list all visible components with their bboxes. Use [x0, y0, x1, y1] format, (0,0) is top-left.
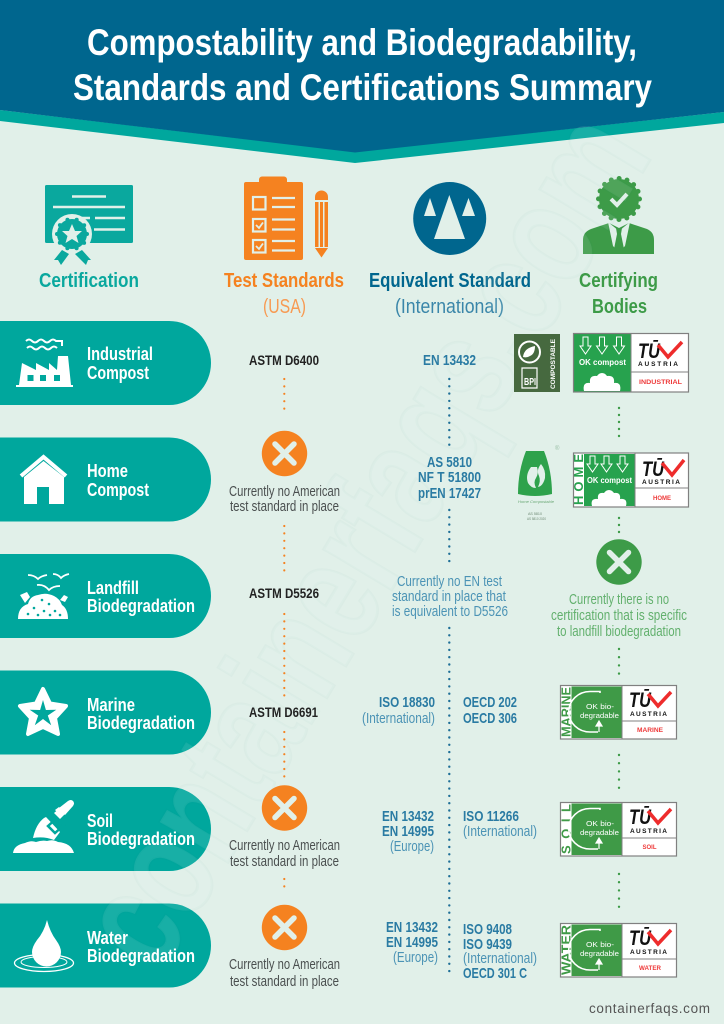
column: equivalent standards: ISO 18830	[379, 694, 435, 711]
logo: OK compost home: TŪ	[642, 458, 665, 481]
header banner	[0, 0, 724, 163]
column: test standards: ASTM D6691	[249, 704, 318, 720]
heading: certifying bodies: Bodies	[592, 296, 647, 318]
logo: OK biodegradable water: WATER	[639, 965, 661, 972]
row: marine biodegradation: Biodegradation	[87, 713, 195, 733]
column: equivalent standards: standard in place that	[392, 588, 507, 605]
logo: OK biodegradable soil: TŪ	[629, 806, 652, 829]
heading: certifying bodies	[579, 270, 658, 318]
logo: OK biodegradable water: OK bio-	[586, 942, 615, 949]
column: equivalent standards: (International)	[362, 710, 435, 727]
icon: starfish	[20, 689, 66, 734]
logo: OK biodegradable water: degradable	[580, 951, 619, 958]
column: test standards: test standard in place	[230, 854, 339, 870]
column: equivalent standards: OECD 301 C	[463, 965, 527, 982]
logo: OK biodegradable soil: OK bio-	[586, 821, 615, 828]
logo: OK compost industrial: OK compost	[579, 358, 626, 367]
x icon: water	[262, 905, 307, 950]
column: equivalent standards: ISO 9439	[463, 936, 512, 953]
logo: home compostable seedling	[518, 445, 560, 521]
logo: BPI compostable	[514, 334, 560, 392]
heading: certification: Certification	[39, 270, 139, 292]
icon: equivalence triangles	[413, 182, 486, 255]
column: certifying bodies: Currently there is no	[569, 591, 669, 608]
logo: OK biodegradable marine: MARINE	[558, 687, 574, 737]
column: equivalent standards: (Europe)	[390, 838, 434, 855]
row: soil biodegradation: Soil	[87, 811, 113, 831]
column: certifying bodies	[514, 334, 688, 977]
logo: OK biodegradable soil: SOIL	[642, 844, 657, 851]
footer url: containerfaqs.com	[589, 1001, 710, 1016]
heading: test standards	[224, 270, 344, 318]
row: landfill biodegradation	[18, 574, 195, 619]
logo: OK compost home: HOME	[571, 454, 586, 505]
logo: OK biodegradable water: TŪ	[629, 927, 652, 950]
column: equivalent standards: EN 13432	[423, 352, 476, 369]
title: Compostability and Biodegradability,	[87, 22, 637, 63]
icon: trowel in soil	[13, 800, 74, 853]
logo: home compostable seedling: AS 5810 2020	[527, 517, 546, 521]
logo: OK biodegradable marine: OK bio-	[586, 704, 615, 711]
row: water biodegradation	[14, 920, 195, 972]
row: marine biodegradation: Marine	[87, 695, 135, 715]
icon: water drop	[14, 920, 74, 972]
heading: equivalent standard	[369, 270, 531, 318]
column: equivalent standards: (International)	[463, 823, 537, 840]
icon: certificate	[45, 185, 133, 265]
row: landfill biodegradation: Biodegradation	[87, 596, 195, 616]
column: equivalent standards: Currently no EN test	[397, 573, 503, 590]
logo: OK biodegradable water: AUSTRIA	[630, 949, 667, 956]
pills: category rows	[0, 321, 211, 988]
logo: OK compost industrial: TŪ	[638, 340, 661, 363]
column: equivalent standards: (Europe)	[393, 949, 438, 966]
icon: clipboard and pencil	[244, 176, 328, 260]
logo: OK compost industrial	[574, 334, 688, 392]
column: equivalent standards: EN 14995	[386, 934, 438, 951]
column: equivalent standards: ISO 11266	[463, 808, 519, 825]
row: industrial compost: Industrial	[87, 344, 153, 364]
x icon: soil	[262, 785, 307, 831]
row: home compost	[21, 457, 149, 504]
logo: OK biodegradable water	[558, 924, 676, 977]
connector dots	[283, 379, 285, 890]
connector dots	[618, 408, 620, 533]
column: equivalent standards: EN 13432	[382, 808, 434, 825]
logo: OK biodegradable soil	[558, 802, 676, 856]
x icon: no landfill certification	[596, 539, 642, 585]
heading: test standards: (USA)	[263, 296, 306, 318]
row: home compost: Home	[87, 461, 128, 481]
row: industrial compost: Compost	[87, 363, 149, 383]
row: water biodegradation: Water	[87, 928, 128, 948]
title	[73, 22, 652, 108]
column: test standards: test standard in place	[230, 974, 339, 990]
logo: OK biodegradable marine: TŪ	[629, 689, 652, 712]
logo: home compostable seedling: ®	[555, 445, 560, 452]
column: test standards: ASTM D5526	[249, 585, 319, 601]
heading: test standards: Test Standards	[224, 270, 344, 292]
column: equivalent standards: EN 13432	[386, 919, 438, 936]
row: marine biodegradation	[20, 689, 195, 734]
column: equivalent standards: is equivalent to D5526	[392, 603, 508, 620]
row: water biodegradation: Biodegradation	[87, 946, 195, 966]
icon: certified person	[583, 178, 654, 254]
logo: OK biodegradable soil: SOIL	[558, 804, 574, 854]
column: equivalent standards: ISO 9408	[463, 921, 512, 938]
logo: OK compost home: OK compost	[587, 476, 632, 485]
icon: factory	[16, 340, 73, 387]
logo: OK biodegradable soil: degradable	[580, 830, 619, 837]
heading: equivalent standard: Equivalent Standard	[369, 270, 531, 292]
row: landfill biodegradation: Landfill	[87, 578, 139, 598]
logo: OK compost home: AUSTRIA	[642, 479, 680, 486]
row: soil biodegradation: Biodegradation	[87, 829, 195, 849]
heading: equivalent standard: (International)	[395, 296, 504, 318]
row: soil biodegradation	[13, 800, 195, 853]
logo: OK biodegradable soil: AUSTRIA	[630, 828, 667, 835]
connector dots lower	[618, 649, 620, 908]
logo: OK compost home: HOME	[653, 495, 672, 502]
column: test standards: ASTM D6400	[249, 352, 319, 368]
logo: OK biodegradable marine: MARINE	[637, 727, 664, 734]
icon: landfill with birds	[18, 574, 69, 619]
logo: OK biodegradable marine: degradable	[580, 713, 619, 720]
icon: house	[21, 457, 66, 504]
heading: certifying bodies: Certifying	[579, 270, 658, 292]
column: test standards: test standard in place	[230, 499, 339, 515]
column: equivalent standards: prEN 17427	[418, 485, 481, 502]
column: equivalent standards: AS 5810	[427, 454, 472, 471]
logo: home compostable seedling: AS 5810	[528, 512, 542, 516]
column: test standards: Currently no American	[229, 484, 340, 500]
column: certifying bodies: to landfill biodegradation	[557, 623, 681, 640]
x icon: home compost	[262, 431, 307, 476]
column: test standards	[229, 352, 340, 990]
column: test standards: Currently no American	[229, 957, 340, 973]
column: equivalent standards	[362, 352, 537, 982]
logo: OK biodegradable water: WATER	[558, 924, 574, 975]
logo: BPI compostable: BPI	[524, 377, 536, 388]
column: equivalent standards: NF T 51800	[418, 469, 481, 486]
column: equivalent standards: OECD 306	[463, 710, 517, 727]
row: home compost: Compost	[87, 480, 149, 500]
logo: OK compost home	[571, 453, 688, 507]
column: test standards: Currently no American	[229, 838, 340, 854]
logo: BPI compostable: COMPOSTABLE	[550, 338, 557, 389]
row: industrial compost	[16, 340, 153, 387]
logo: home compostable seedling: Home Compostable	[518, 499, 555, 504]
logo: OK biodegradable marine	[558, 686, 676, 739]
logo: OK compost industrial: INDUSTRIAL	[639, 379, 682, 386]
column: equivalent standards: OECD 202	[463, 694, 517, 711]
column: equivalent standards: (International)	[463, 950, 537, 967]
column: equivalent standards: EN 14995	[382, 823, 434, 840]
column: certifying bodies: certification that is specific	[551, 607, 687, 624]
connector dots	[448, 379, 450, 978]
logo: OK compost industrial: AUSTRIA	[638, 361, 678, 368]
logo: OK biodegradable marine: AUSTRIA	[630, 711, 667, 718]
